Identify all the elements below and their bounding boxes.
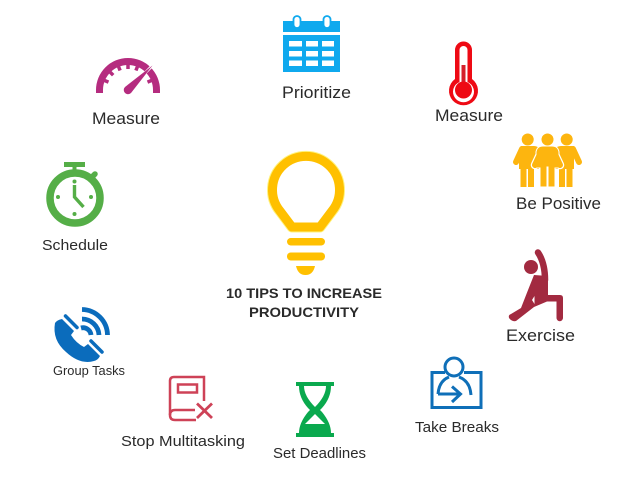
icon: person with arrow in frame xyxy=(432,358,481,408)
title xyxy=(226,285,382,320)
icon: calendar xyxy=(283,16,340,72)
label: Measure (thermometer): Measure xyxy=(435,107,503,125)
icon: thermometer xyxy=(449,42,478,105)
icon: stopwatch xyxy=(50,162,100,223)
label: Measure (gauge): Measure xyxy=(92,110,160,128)
label: Group Tasks: Group Tasks xyxy=(53,364,125,378)
label: Stop Multitasking: Stop Multitasking xyxy=(121,433,245,450)
label: Set Deadlines: Set Deadlines xyxy=(273,446,366,462)
title: PRODUCTIVITY xyxy=(249,304,360,320)
label: Be Positive: Be Positive xyxy=(516,195,601,213)
icon: light bulb xyxy=(272,156,340,275)
label: Prioritize: Prioritize xyxy=(282,84,351,102)
title: 10 TIPS TO INCREASE xyxy=(226,285,382,301)
icon: hourglass xyxy=(296,382,334,437)
icon: book with cross xyxy=(170,377,212,420)
icon: exercise figure xyxy=(509,252,563,321)
label: Take Breaks: Take Breaks xyxy=(415,419,499,436)
icon: speedometer gauge xyxy=(96,58,160,94)
icon: group of people xyxy=(516,134,579,187)
icon: telephone with signal xyxy=(54,310,108,362)
label: Exercise: Exercise xyxy=(506,327,575,345)
label: Schedule: Schedule xyxy=(42,237,108,254)
